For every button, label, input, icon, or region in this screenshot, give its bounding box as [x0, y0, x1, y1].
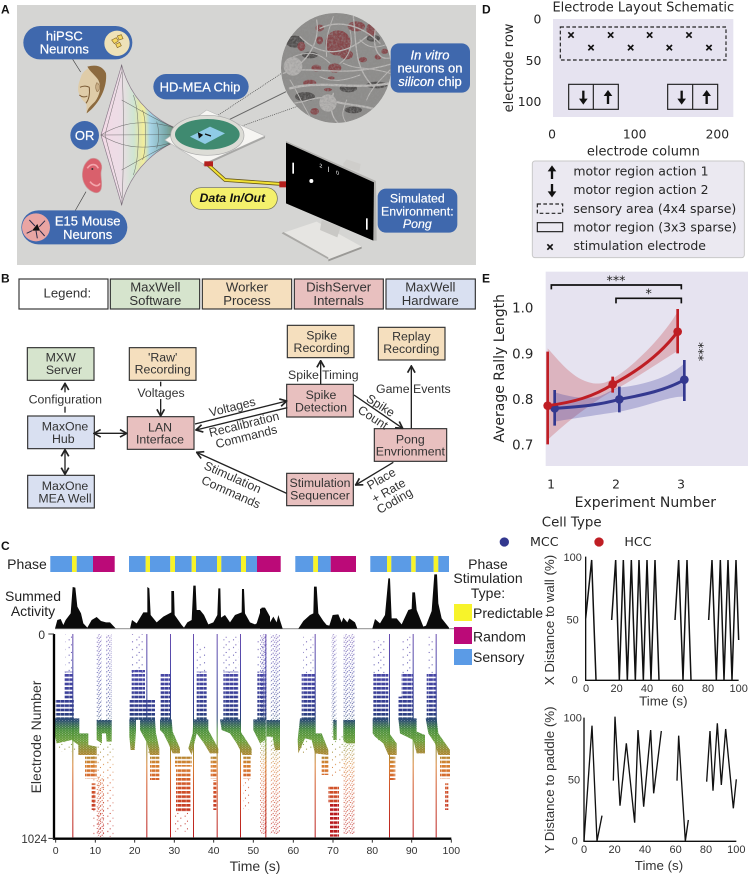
legend row [19, 279, 475, 309]
arrow labels: Place [364, 465, 398, 493]
y axis labels: 1.0 [512, 302, 533, 317]
y axis labels: 50 [526, 54, 541, 68]
Y chart labels: 40 [639, 844, 651, 856]
box: Raw Recording: 'Raw' [148, 350, 177, 364]
box: MXW Server: MXW [46, 350, 76, 364]
X chart labels: 0 [572, 675, 578, 687]
pill: hiPSC Neurons [23, 26, 132, 59]
legend: electrode layout: motor region action 2 [573, 182, 709, 197]
callout: Simulated Environment: Pong: Pong [403, 217, 432, 231]
box: Spike Recording [287, 325, 354, 358]
Y chart labels: 0 [581, 844, 587, 856]
MCC confidence band [555, 363, 684, 422]
significance stars: *** [695, 342, 710, 361]
HCC series [543, 309, 682, 444]
arrow labels: Spike [364, 391, 397, 420]
X chart trace [586, 560, 739, 680]
arrow labels: Spike Timing [288, 368, 359, 382]
raster axis labels: 30 [168, 845, 180, 857]
raster axis labels: Electrode Number [28, 680, 44, 793]
pill: hiPSC Neurons: hiPSC [46, 29, 83, 44]
raster axis labels: 90 [406, 845, 418, 857]
raster axes [54, 634, 451, 839]
callout: In vitro neurons on silicon chip: neurons on [398, 61, 462, 76]
raster random-phase columns [97, 634, 355, 837]
X chart labels: 80 [702, 683, 714, 695]
connector lines [73, 59, 298, 211]
summed activity label: Summed [5, 588, 61, 604]
chart: X distance to wall [542, 552, 748, 709]
box: Spike Detection [287, 384, 353, 417]
sensory area dashed rectangle [560, 27, 726, 60]
illustration: monitor stand [282, 159, 362, 261]
raster axis labels: 100 [443, 845, 460, 857]
significance stars: * [646, 285, 652, 300]
y axis labels: Average Rally Length [492, 294, 508, 443]
significance brackets [551, 285, 681, 303]
legend labels: Hardware [402, 293, 459, 308]
x axis labels: 0 [548, 127, 556, 141]
motor regions [569, 84, 718, 109]
legend: electrode layout: motor region (3x3 sparse) [573, 220, 737, 235]
panel E letter: E [482, 271, 490, 285]
box: Pong Environment: Envrionment [376, 445, 446, 459]
pill: E15 Mouse Neurons: Neurons [63, 227, 113, 242]
box: MaxOne Hub: MaxOne [42, 420, 88, 434]
pill: E15 Mouse Neurons [21, 210, 127, 244]
panel D title: Electrode Layout Schematic [552, 0, 734, 15]
Y chart labels: 100 [564, 713, 582, 725]
significance stars [607, 272, 710, 361]
panel A background [17, 5, 476, 265]
x axis labels: 200 [706, 127, 729, 141]
box: Spike Detection: Detection [295, 400, 347, 414]
box: Replay Recording: Recording [383, 342, 440, 356]
arrow labels: Stimulation [202, 459, 263, 496]
panel D letter: D [482, 2, 491, 16]
y axis labels [492, 294, 533, 453]
legend: cell type: MCC [530, 534, 559, 549]
illustration: neurons on silicon micrograph [280, 12, 393, 125]
callout: Simulated Environment: Pong: Environment: [381, 204, 454, 218]
box: Stimulation Sequencer: Sequencer [290, 488, 350, 502]
raster dense bottom block [330, 803, 339, 837]
x axis labels: 1 [547, 477, 555, 491]
raster axis labels: 1024 [21, 834, 48, 846]
legend labels: DishServer [306, 280, 372, 295]
arrow labels: + Rate [369, 476, 408, 506]
Y chart trace [584, 717, 736, 841]
Y chart labels: Y Distance to paddle (%) [542, 706, 557, 854]
X chart labels: 100 [730, 683, 748, 695]
raster plot: electrode activity [48, 634, 451, 843]
cable: data in/out [204, 161, 287, 187]
x axis labels [548, 127, 729, 160]
x axis labels: Experiment Number [575, 495, 716, 511]
pill: HD-MEA Chip [153, 74, 249, 99]
legend: electrode layout: motor region action 1 [573, 164, 709, 179]
callout: Simulated Environment: Pong: Simulated [390, 191, 445, 205]
legend labels: Process [223, 293, 271, 308]
legend: cell type [500, 515, 652, 549]
raster axis labels: Time (s) [230, 858, 280, 874]
box: MaxOne MEA Well [28, 475, 94, 508]
arrow labels: Commands [214, 422, 279, 451]
x axis labels: 3 [677, 477, 685, 491]
icon: mouse embryo [82, 158, 102, 193]
raster axis labels: 80 [366, 845, 378, 857]
legend: phase stimulation type: Predictable [473, 605, 543, 621]
pill: Data In/Out [190, 188, 277, 209]
raster axis labels: 20 [129, 845, 141, 857]
X chart axes [586, 557, 739, 680]
y axis labels: 100 [518, 95, 541, 109]
box: Spike Recording: Spike [306, 329, 337, 343]
plot background [546, 272, 748, 466]
legend: phase stimulation type [453, 556, 543, 665]
arrow labels: Recalibration [207, 409, 281, 440]
legend labels: Legend: [44, 286, 91, 301]
stimulation electrodes [568, 32, 712, 50]
legend labels [44, 280, 459, 308]
Y chart labels: 80 [700, 844, 712, 856]
panel B: system architecture diagram [1, 271, 475, 517]
box: Raw Recording: Recording [135, 362, 191, 376]
summed activity histogram [55, 574, 455, 629]
funnel: neural network mapping [101, 65, 192, 205]
illustration: HD-MEA chip [165, 110, 265, 166]
X chart labels: 100 [564, 552, 582, 564]
significance stars: *** [607, 272, 625, 287]
box: Replay Recording [378, 327, 445, 360]
box: Stimulation Sequencer: Stimulation [289, 476, 351, 490]
box: Raw Recording [129, 348, 196, 380]
legend: phase stimulation type: Random [473, 628, 526, 644]
box: LAN Interface: LAN [148, 420, 172, 434]
panel A letter: A [1, 2, 10, 16]
HCC confidence band [548, 312, 678, 440]
raster axis labels: 10 [89, 845, 101, 857]
raster stimulation lines [72, 634, 437, 837]
callout: Simulated Environment: Pong [378, 189, 457, 233]
box: Pong Environment [374, 429, 447, 461]
legend labels: MaxWell [405, 280, 456, 295]
illustration: monitor showing Pong [286, 141, 377, 241]
box: MaxOne Hub: Hub [52, 432, 75, 446]
raster row bands [56, 670, 450, 812]
raster axis labels: 0 [38, 628, 45, 642]
arrow labels: Commands [199, 473, 263, 512]
raster sparse speckle [57, 634, 435, 837]
callout: In vitro neurons on silicon chip: silicon chip [398, 74, 462, 89]
legend: electrode layout: stimulation electrode [573, 238, 706, 253]
arrows [65, 361, 411, 493]
panel E: average rally length chart [482, 271, 748, 549]
raster axis labels: 40 [208, 845, 220, 857]
pill: Data In/Out: Data In/Out [199, 191, 266, 205]
legend labels: Internals [313, 293, 364, 308]
illustration: monitor showing Pong: 0 [336, 170, 339, 177]
legend labels: Worker [226, 280, 269, 295]
raster axis ticks [48, 634, 451, 843]
raster axis labels: 50 [247, 845, 259, 857]
motor arrows [579, 90, 711, 105]
y axis labels [502, 13, 541, 112]
X chart labels: 60 [672, 683, 684, 695]
y axis labels: 0.7 [512, 438, 533, 453]
y axis labels: 0.9 [512, 347, 533, 362]
panel D: electrode layout schematic [482, 0, 744, 258]
panel B letter: B [1, 271, 10, 285]
electrode plot area [553, 19, 733, 117]
raster axis labels: 0 [53, 845, 59, 857]
legend: electrode layout: sensory area (4x4 sparse) [573, 201, 736, 216]
Y chart labels: 100 [727, 844, 745, 856]
legend: phase stimulation type: Sensory [473, 649, 524, 665]
legend: cell type: HCC [624, 534, 652, 549]
callout: In vitro neurons on silicon chip [391, 43, 470, 93]
x axis labels: 2 [612, 477, 620, 491]
box: LAN Interface: Interface [136, 433, 184, 447]
phase bar [50, 556, 449, 572]
X chart labels: 40 [641, 683, 653, 695]
box: Stimulation Sequencer [287, 473, 353, 506]
phase label: Phase [7, 556, 47, 572]
summed activity label: Activity [11, 603, 55, 619]
arrow labels: Count [355, 403, 391, 433]
pill: hiPSC Neurons: Neurons [40, 42, 89, 57]
pill: HD-MEA Chip: HD-MEA Chip [160, 80, 240, 95]
arrow labels [29, 368, 451, 517]
box: LAN Interface [127, 417, 194, 449]
arrow labels: Coding [374, 485, 415, 517]
box: MaxOne Hub [28, 416, 94, 449]
box: Spike Detection: Spike [306, 388, 337, 402]
x axis labels: 100 [623, 127, 647, 141]
chart: Y distance to paddle [542, 706, 745, 873]
X chart labels [542, 552, 748, 709]
legend: phase stimulation type: Phase [468, 556, 508, 572]
icon: human head [78, 66, 106, 113]
legend labels: Software [129, 293, 181, 308]
arrow labels: Configuration [29, 393, 102, 407]
legend: phase stimulation type: Type: [471, 585, 505, 601]
X chart labels: 0 [583, 683, 589, 695]
box: MXW Server [27, 348, 94, 380]
y axis labels: electrode row [502, 23, 517, 112]
panel A: experimental system illustration [1, 2, 476, 265]
x axis labels: electrode column [587, 145, 700, 160]
pill: OR: OR [75, 128, 94, 143]
box: MXW Server: Server [46, 363, 82, 377]
raster axis labels: 70 [327, 845, 339, 857]
raster axis labels: 60 [287, 845, 299, 857]
Y chart labels: 50 [568, 775, 580, 787]
raster axis labels [21, 628, 460, 874]
X chart labels: X Distance to wall (%) [542, 555, 557, 685]
arrow labels: Voltages [137, 386, 185, 400]
pill: OR [70, 121, 99, 150]
legend: phase stimulation type: Stimulation [453, 570, 523, 586]
box: MaxOne MEA Well: MaxOne [42, 479, 88, 493]
X chart labels: 20 [611, 683, 623, 695]
box: Spike Recording: Recording [294, 341, 350, 355]
x axis labels [547, 477, 716, 511]
Y chart labels: 60 [670, 844, 682, 856]
box: Replay Recording: Replay [392, 330, 431, 344]
Y chart axes [584, 718, 736, 841]
y axis labels: 0.8 [512, 393, 533, 408]
panel C letter: C [1, 539, 10, 553]
X chart labels: Time (s) [639, 694, 688, 709]
legend: electrode layout [532, 161, 744, 258]
y axis labels: 0 [533, 13, 541, 27]
box: MaxOne MEA Well: MEA Well [38, 491, 92, 505]
arrow labels: Voltages [208, 395, 257, 420]
callout: In vitro neurons on silicon chip: In vitro [411, 47, 449, 62]
legend labels: MaxWell [130, 280, 181, 295]
Y chart labels [542, 706, 745, 873]
Y chart labels: Time (s) [635, 858, 683, 873]
arrow labels: Game Events [376, 382, 451, 396]
summed activity label [5, 588, 61, 619]
pill: E15 Mouse Neurons: E15 Mouse [55, 214, 121, 229]
box: Pong Environment: Pong [396, 432, 425, 446]
raster dense funnels [55, 718, 450, 755]
MCC series [550, 360, 689, 426]
illustration: monitor showing Pong: 2 [319, 163, 322, 170]
Y chart labels: 0 [572, 836, 578, 848]
X chart labels: 50 [567, 614, 579, 626]
legend: cell type: Cell Type [542, 515, 602, 530]
Y chart labels: 20 [609, 844, 621, 856]
